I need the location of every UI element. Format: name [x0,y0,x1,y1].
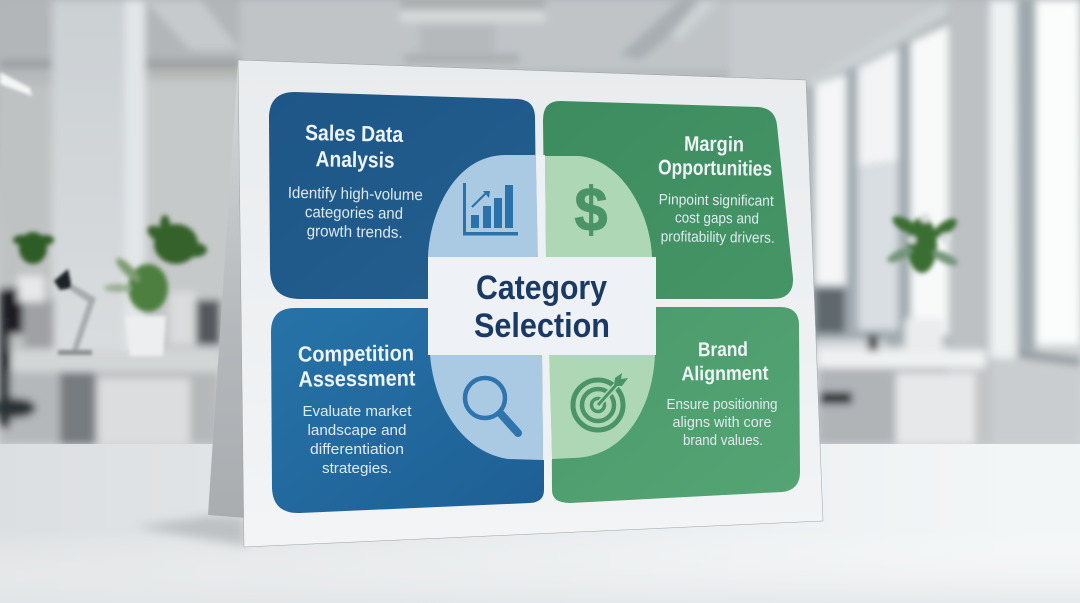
quadrant: target tile [549,353,655,459]
body text: margin opportunities: cost gaps and [675,209,759,228]
panel: sales data analysis [269,92,537,299]
body text: brand alignment: Ensure positioning [666,397,778,413]
card board [238,60,823,547]
body text: sales data analysis: categories and [305,204,403,223]
body text: competition assessment: Evaluate market [302,403,412,420]
body text: sales data analysis: Identify high-volume [288,185,423,204]
table surface [0,444,1080,603]
title: category selection: Selection [474,307,610,345]
icon: bar chart [463,183,518,236]
card back flap [208,60,246,518]
body text: competition assessment: differentiation [310,441,404,458]
panel: competition assessment [271,308,544,513]
body text: sales data analysis: growth trends. [307,223,403,242]
quadrant: chart tile [428,155,538,257]
body text: competition assessment: strategies. [322,460,392,477]
heading: competition assessment: Competition [298,340,414,367]
quadrant: magnifier tile [430,354,543,460]
panel: brand alignment [551,307,800,503]
heading line two: Assessment [298,365,416,392]
body text: margin opportunities: profitability drivers. [661,228,775,247]
body text: competition assessment [302,403,412,477]
body text: competition assessment: landscape and [308,422,406,439]
body text: brand alignment: brand values. [683,433,763,449]
heading line two: Alignment [681,363,769,385]
center band [428,257,656,355]
body text: margin opportunities [658,191,775,247]
heading: brand alignment: Brand [698,339,748,361]
body text: brand alignment [666,397,778,449]
icon: dollar sign: $ [574,176,608,245]
heading line two: Analysis [315,146,395,173]
body text: margin opportunities: Pinpoint significant [659,191,775,210]
potted plants [13,213,960,312]
heading: margin opportunities: Margin [684,133,744,156]
icon: magnifying glass [465,378,518,433]
body text: sales data analysis [287,185,423,242]
icon: target with arrow [573,373,628,430]
heading: sales data analysis: Sales Data [305,120,404,147]
body text: brand alignment: aligns with core [672,415,772,431]
panel: margin opportunities [543,101,793,299]
vertical gutters between tiles [536,155,552,460]
title: category selection [474,269,610,345]
heading line two: Opportunities [658,156,772,181]
title: category selection: Category [476,269,607,307]
quadrant: dollar tile [545,156,652,257]
